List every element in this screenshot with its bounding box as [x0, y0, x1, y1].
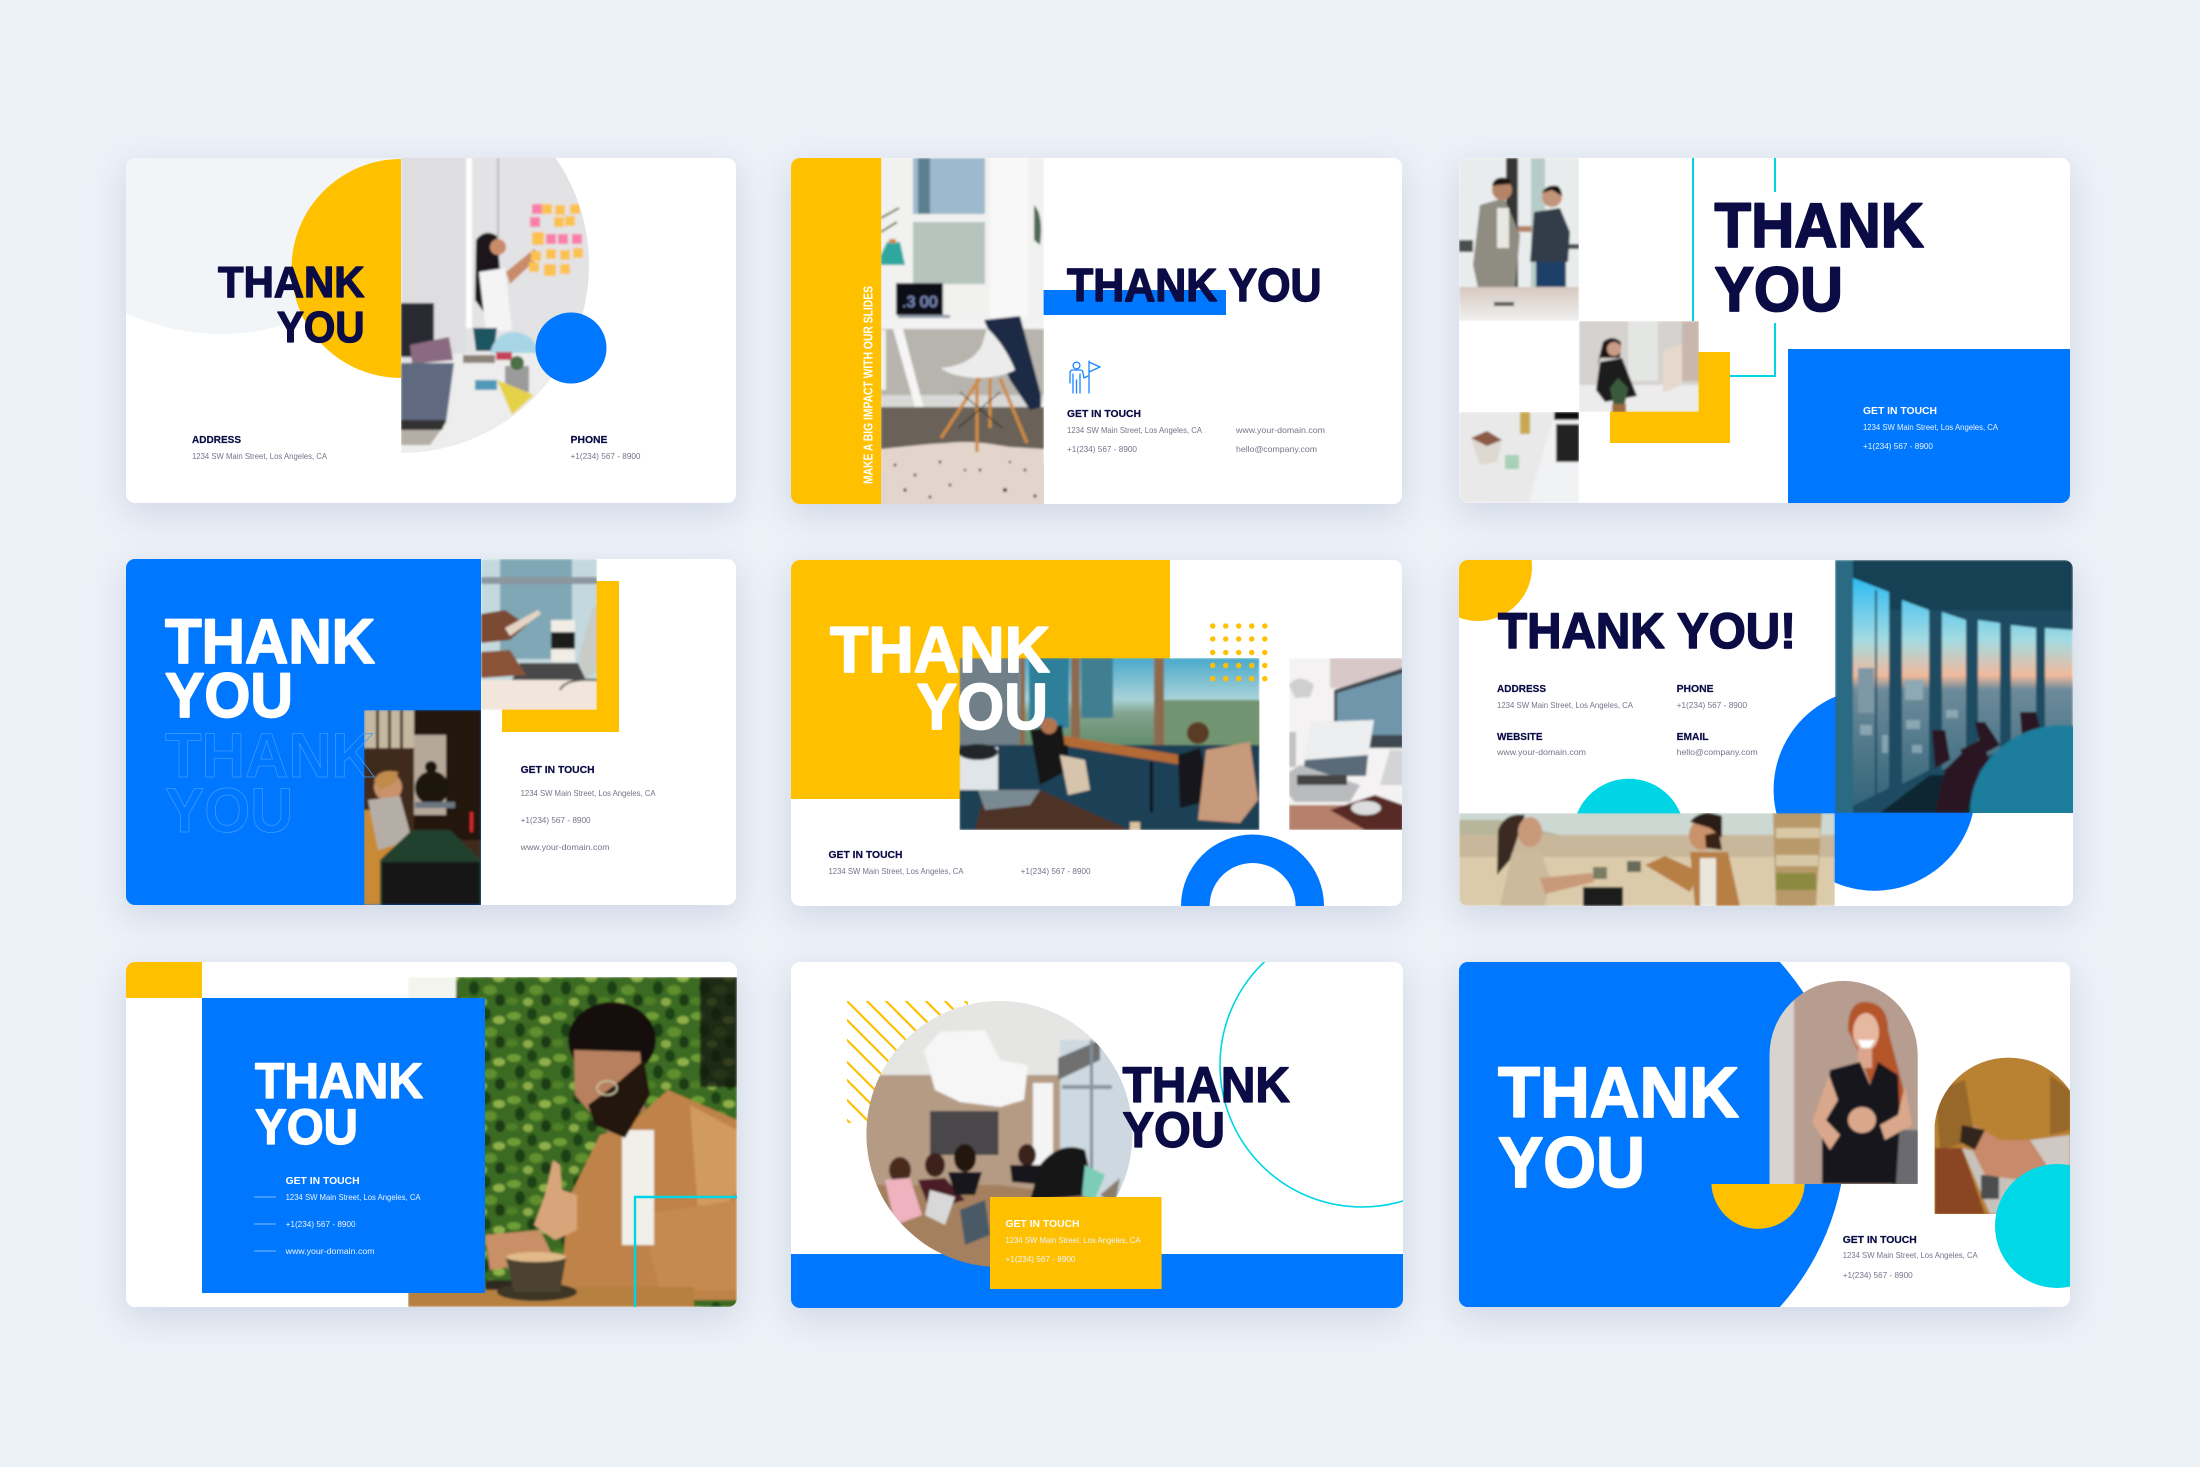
contact details: 1234 SW Main Street, Los Angeles, CA: [1067, 426, 1203, 435]
phone block: +1(234) 567 - 8900: [1677, 701, 1748, 710]
email block: EMAIL: [1677, 731, 1709, 743]
photo: meeting in cafe: [364, 710, 481, 905]
phone block: [1677, 683, 1748, 710]
photo: boardroom circle: [866, 1001, 1132, 1267]
blue highlight bar: [1044, 290, 1226, 315]
blue contact panel: 1234 SW Main Street, Los Angeles, CA: [1863, 423, 1999, 432]
title: THANK YOU: [1122, 1057, 1290, 1158]
yellow half circle: [1711, 1184, 1805, 1229]
email block: hello@company.com: [1677, 748, 1758, 757]
photo: hands on laptop: [481, 559, 597, 710]
blue content card: [202, 998, 485, 1293]
yellow corner circle: [1424, 513, 1532, 621]
title: THANK YOU: YOU: [165, 661, 293, 731]
address block: 1234 SW Main Street, Los Angeles, CA: [192, 452, 328, 461]
teal outline circle: [1220, 923, 1504, 1207]
yellow half circle: [291, 159, 401, 378]
photo: laptop flat lay: [1459, 412, 1579, 503]
panel: slide 8: [791, 962, 1403, 1308]
title: THANK YOU: [1714, 191, 1924, 325]
blue bottom strip: [791, 1254, 1403, 1308]
title: THANK YOU: YOU: [255, 1099, 358, 1155]
contact details: +1(234) 567 - 8900: [521, 816, 591, 825]
arch photo: smiling woman: [1765, 975, 1921, 1187]
contact details: 1234 SW Main Street, Los Angeles, CA: [1843, 1251, 1978, 1260]
blue circle: [1774, 689, 1976, 891]
title: THANK YOU: [1498, 1054, 1739, 1203]
yellow contact card: 1234 SW Main Street, Los Angeles, CA: [1006, 1236, 1141, 1245]
cyan circle: [1573, 779, 1685, 890]
address block: ADDRESS: [1497, 683, 1546, 695]
vertical tagline: MAKE A BIG IMPACT WITH OUR SLIDES: [862, 286, 876, 484]
photo: couple with coffee: [1459, 813, 1835, 906]
yellow square: [1610, 352, 1730, 443]
website block: [1496, 731, 1586, 757]
phone block: +1(234) 567 - 8900: [570, 452, 641, 461]
title: THANK YOU: THANK YOU: [1067, 259, 1322, 311]
photo: panoramic boardroom: [1835, 560, 2073, 813]
contact details: [520, 764, 656, 852]
contact details: [254, 1175, 421, 1256]
outlined echo title: [165, 721, 375, 846]
address block: ADDRESS: [192, 434, 241, 446]
contact details: +1(234) 567 - 8900: [1021, 867, 1091, 876]
blue circle: [536, 312, 606, 384]
photo: two men: [1459, 158, 1579, 321]
panel: slide 3: [1459, 158, 2070, 503]
address block: [1497, 683, 1634, 710]
title: THANK YOU!: THANK YOU!: [1498, 603, 1796, 659]
title: THANK YOU: THANK: [1714, 191, 1924, 261]
outlined echo title: YOU: [165, 776, 293, 846]
title: THANK YOU: [218, 259, 365, 352]
yellow side band: [791, 158, 882, 504]
website block: WEBSITE: [1497, 731, 1542, 743]
panel: slide 9: [1459, 962, 2070, 1307]
photo: woman at sticky-note wall: [401, 158, 589, 453]
icon: person with flag: [1070, 361, 1100, 393]
contact details: +1(234) 567 - 8900: [1067, 445, 1137, 454]
contact details: GET IN TOUCH: [1843, 1234, 1917, 1246]
phone block: PHONE: [570, 434, 608, 446]
title: THANK YOU: [165, 607, 375, 731]
yellow contact card: [990, 1197, 1162, 1289]
photo: desk by window: [881, 158, 1044, 504]
outlined echo title: THANK: [165, 721, 375, 791]
teal lines: [1693, 158, 1775, 376]
contact details: 1234 SW Main Street, Los Angeles, CA: [521, 789, 656, 798]
contact details: GET IN TOUCH: [286, 1175, 360, 1187]
title: THANK YOU: [830, 613, 1050, 743]
arch photo: hands on laptop: [1934, 1058, 2070, 1214]
title: THANK YOU: THANK: [1498, 1054, 1739, 1133]
title: THANK YOU: YOU: [277, 304, 364, 352]
contact details: www.your-domain.com: [285, 1247, 375, 1256]
panel: slide 2: [791, 158, 1402, 504]
yellow contact card: GET IN TOUCH: [1006, 1218, 1080, 1230]
yellow block: [791, 560, 1170, 799]
title: THANK YOU: [255, 1053, 423, 1155]
blue block: [126, 559, 481, 905]
blue contact panel: +1(234) 567 - 8900: [1863, 442, 1933, 451]
teal corner line: [635, 1197, 737, 1307]
panel: slide 7: [126, 962, 737, 1307]
blue contact panel: GET IN TOUCH: [1863, 405, 1937, 417]
panel: slide 4: [126, 559, 736, 905]
panel: slide 6: [1459, 560, 2073, 906]
phone block: [570, 434, 641, 461]
contact details: [1843, 1234, 1978, 1280]
contact details: 1234 SW Main Street, Los Angeles, CA: [286, 1193, 421, 1202]
title: THANK YOU: THANK: [165, 607, 375, 677]
yellow corner square: [126, 962, 202, 998]
contact details: 1234 SW Main Street, Los Angeles, CA: [828, 867, 964, 876]
website block: www.your-domain.com: [1496, 748, 1586, 757]
contact details: +1(234) 567 - 8900: [286, 1220, 356, 1229]
contact details: GET IN TOUCH: [1067, 408, 1141, 420]
contact details: www.your-domain.com: [1235, 426, 1325, 435]
contact details: GET IN TOUCH: [828, 849, 902, 861]
title: THANK YOU: THANK: [830, 613, 1050, 686]
panel: slide 1: [126, 158, 736, 503]
contact details: www.your-domain.com: [520, 843, 610, 852]
photo: laptop and monitor: [1289, 658, 1403, 830]
big blue circle: [1330, 876, 1846, 1392]
address block: [192, 434, 328, 461]
yellow diagonal stripes: [847, 1001, 968, 1123]
dot grid: [1210, 623, 1268, 681]
phone block: PHONE: [1677, 683, 1714, 695]
grey background circle: [0, 0, 446, 334]
title: THANK YOU: YOU: [1714, 255, 1843, 325]
contact details: [1067, 408, 1325, 454]
photo: city office: [958, 658, 1260, 830]
contact details: hello@company.com: [1236, 445, 1317, 454]
email block: [1677, 731, 1758, 757]
title: THANK YOU: YOU: [1498, 1124, 1645, 1203]
contact details: [828, 849, 1091, 876]
contact details: +1(234) 567 - 8900: [1843, 1271, 1913, 1280]
photo: woman at monitor: [1579, 321, 1699, 412]
address block: 1234 SW Main Street, Los Angeles, CA: [1497, 701, 1634, 710]
title: THANK YOU: THANK: [218, 259, 365, 307]
title: THANK YOU: THANK: [255, 1053, 423, 1109]
contact details: GET IN TOUCH: [521, 764, 595, 776]
title: THANK YOU: YOU: [917, 670, 1048, 743]
cyan circle: [1995, 1164, 2119, 1288]
yellow contact card: +1(234) 567 - 8900: [1006, 1255, 1076, 1264]
title: THANK YOU: THANK: [1122, 1057, 1290, 1113]
photo: man with thumbs up: [408, 977, 737, 1307]
blue ring: [1181, 834, 1324, 906]
blue contact panel: [1788, 349, 2070, 503]
yellow square: [502, 581, 619, 732]
title: THANK YOU: YOU: [1122, 1102, 1225, 1158]
photo: desk by window: .3 00: [902, 294, 938, 311]
panel: slide 5: [791, 560, 1402, 906]
